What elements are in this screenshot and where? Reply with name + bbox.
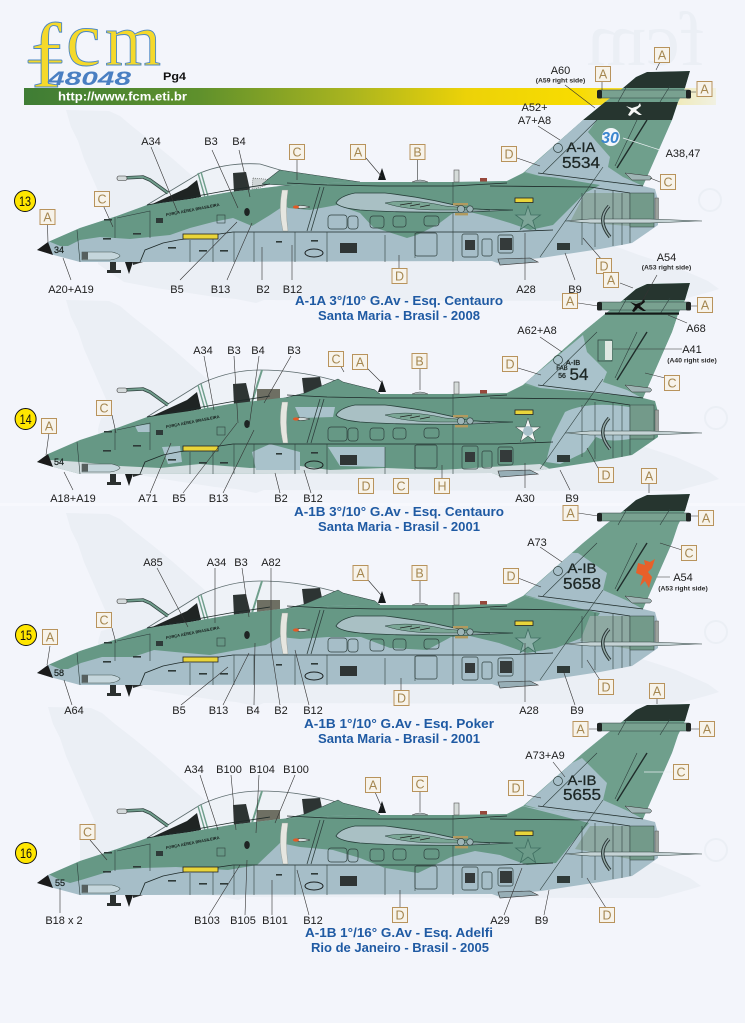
part codes 15: B9 <box>570 705 584 717</box>
nose number 14: 54 <box>54 457 64 467</box>
yellow marking 13 <box>515 198 533 202</box>
nose number 16: 55 <box>55 878 65 888</box>
caption 16: Rio de Janeiro - Brasil - 2005 <box>311 940 489 955</box>
part codes 14: A62+A8 <box>517 325 557 337</box>
part codes 14: A34 <box>193 345 213 357</box>
leaders 16 <box>60 698 700 915</box>
caption 16 <box>305 925 493 955</box>
badge 15: 15 <box>20 627 32 643</box>
callout boxes 16: D <box>511 782 521 796</box>
part codes 15: B13 <box>209 705 228 717</box>
callout boxes 15: B <box>415 566 424 580</box>
tail code 14: A-IB <box>566 358 580 367</box>
callout boxes 15: D <box>601 680 611 694</box>
callout boxes 13: D <box>395 270 404 284</box>
part codes 16: B103 <box>194 915 220 927</box>
tail code 16 <box>563 772 601 804</box>
aircraft 16 <box>37 704 702 907</box>
part codes 13: B13 <box>211 284 230 296</box>
part codes 13: A28 <box>516 284 536 296</box>
part codes 16: B100 <box>283 764 309 776</box>
part codes 14: B12 <box>303 493 323 505</box>
callout boxes 16: C <box>83 826 92 840</box>
part codes 13: B3 <box>204 136 218 148</box>
part codes 15: B3 <box>234 557 248 569</box>
part codes 14: A41 <box>682 344 702 356</box>
stag emblem 14 <box>630 299 646 312</box>
part codes 13: A7+A8 <box>518 115 551 127</box>
part codes 14: A54 <box>657 252 676 264</box>
callout boxes 15: C <box>684 546 694 560</box>
show-through ghosts from the reverse of the sheet: fcm <box>587 0 705 82</box>
tail code 13 <box>562 139 600 172</box>
callout boxes 16: C <box>415 778 425 792</box>
callout boxes 15 <box>42 468 714 706</box>
part codes 14: (A40 right side) <box>667 358 717 364</box>
national star 15 <box>516 629 540 652</box>
badge 14 <box>15 408 36 430</box>
part codes 14: B4 <box>251 345 265 357</box>
part codes 15: A54 <box>673 572 693 584</box>
part codes 13: A38,47 <box>666 148 700 160</box>
part codes 14: B2 <box>274 493 288 505</box>
fcm logo: f <box>31 5 62 107</box>
callout boxes 15: A <box>702 512 711 526</box>
callout boxes 14: A <box>356 356 365 370</box>
callout boxes 15: A <box>46 630 55 644</box>
callout boxes 13: A <box>354 146 363 160</box>
callout boxes 15: A <box>645 470 654 484</box>
callout boxes 15: A <box>566 506 575 520</box>
tail code 15: 5658 <box>563 576 601 593</box>
badge 13: 13 <box>19 193 31 209</box>
part codes 14: B5 <box>172 493 186 505</box>
callout boxes 14: B <box>415 354 424 368</box>
tail stag emblem 13 <box>626 103 642 116</box>
callout boxes 13: B <box>413 146 422 160</box>
part codes 14: B9 <box>565 493 579 505</box>
caption 14: Santa Maria - Brasil - 2001 <box>318 519 480 534</box>
part codes 13: B12 <box>283 284 302 296</box>
camouflage 13 <box>48 71 690 246</box>
camouflage 14 <box>40 283 690 482</box>
part codes 15: (A53 right side) <box>658 586 708 592</box>
callout boxes 13: A <box>700 82 709 96</box>
part codes 13: B4 <box>232 136 246 148</box>
part codes 14: B13 <box>209 493 228 505</box>
tail code 14: 56 <box>558 373 566 380</box>
badge 15 <box>16 624 36 646</box>
part codes 16: B105 <box>230 915 256 927</box>
camouflage 16 <box>48 704 690 883</box>
part codes 13: A34 <box>141 136 161 148</box>
callout boxes 16: A <box>653 684 662 698</box>
part codes 13: A52+ <box>522 102 548 114</box>
part codes 15: B12 <box>303 705 323 717</box>
lion emblem <box>636 559 655 588</box>
part codes 15 <box>64 537 708 717</box>
part codes 14: A30 <box>515 493 535 505</box>
part codes 16: B12 <box>303 915 323 927</box>
fin panel 14 <box>598 340 612 361</box>
callout boxes 13 <box>40 48 712 284</box>
part codes 13: B9 <box>568 284 582 296</box>
part codes 14 <box>50 252 717 505</box>
national roundel 14 <box>516 418 540 442</box>
part codes 14: A68 <box>686 323 706 335</box>
tail code 13: A-IA <box>566 139 596 155</box>
part codes 13: A60 <box>551 65 570 77</box>
callout boxes 13: C <box>97 192 107 206</box>
caption 13: Santa Maria - Brasil - 2008 <box>318 308 480 323</box>
callout boxes 13: C <box>663 176 673 190</box>
callout boxes 13: D <box>504 148 514 162</box>
caption 13: A-1A 3°/10° G.Av - Esq. Centauro <box>295 293 503 308</box>
part codes 15: A85 <box>143 557 163 569</box>
part codes 15: A34 <box>207 557 226 569</box>
callout boxes 14: A <box>701 298 710 312</box>
header band <box>24 88 716 105</box>
tail code 14 <box>556 358 588 384</box>
page number: Pg4 <box>163 71 187 83</box>
part codes 16: B9 <box>535 915 548 927</box>
callout boxes 13: A <box>43 210 52 224</box>
national star 16 <box>516 839 540 862</box>
callout boxes 16: C <box>676 766 686 780</box>
part codes 13: (A59 right side) <box>536 78 585 84</box>
part codes 16: A29 <box>490 915 510 927</box>
callout boxes 13: D <box>599 260 609 274</box>
part codes 16: B100 <box>216 764 242 776</box>
caption 15: A-1B 1°/10° G.Av - Esq. Poker <box>304 716 494 731</box>
part codes 13: B5 <box>170 284 184 296</box>
part codes 14: A71 <box>138 493 158 505</box>
caption 16: A-1B 1°/16° G.Av - Esq. Adelfi <box>305 925 493 940</box>
part codes 16 <box>45 750 565 927</box>
part codes 14: B3 <box>287 345 301 357</box>
aircraft 14 <box>37 283 702 486</box>
callout boxes 14: C <box>99 402 109 416</box>
leaders 15 <box>47 484 698 705</box>
nose number 13: 34 <box>54 245 64 255</box>
nose number 15: 58 <box>54 668 64 678</box>
callout boxes 14: A <box>607 274 616 288</box>
part codes 16: A73+A9 <box>525 750 565 762</box>
aircraft 13 <box>37 71 702 274</box>
aircraft 15 <box>37 494 702 697</box>
callout boxes 15: A <box>356 566 365 580</box>
part codes 13: A20+A19 <box>48 284 94 296</box>
website url: http://www.fcm.eti.br <box>58 90 187 104</box>
callout boxes 16 <box>80 684 714 922</box>
part codes 14: A18+A19 <box>50 493 96 505</box>
callout boxes 16: A <box>703 722 712 736</box>
badge 14: 14 <box>20 411 32 427</box>
caption 15 <box>304 716 494 746</box>
part codes 15: A28 <box>519 705 539 717</box>
tail code 14: FAB <box>556 366 568 372</box>
callout boxes 15: D <box>397 692 406 706</box>
caption 14 <box>294 504 504 534</box>
callout boxes 15: C <box>99 614 109 628</box>
callout boxes 14: D <box>601 468 611 482</box>
callout boxes 16: D <box>602 908 612 922</box>
product number: 48048 <box>46 69 132 90</box>
callout boxes 16: A <box>576 722 585 736</box>
callout boxes 14: C <box>396 480 406 494</box>
camouflage 15 <box>48 494 690 669</box>
callout boxes 14: C <box>331 352 341 366</box>
callout boxes 14: D <box>505 358 515 372</box>
badge 13 <box>14 190 36 212</box>
part codes 15: A64 <box>64 705 84 717</box>
caption 13 <box>295 293 503 323</box>
callout boxes 14: A <box>566 294 575 308</box>
tail code 14: 54 <box>570 365 588 384</box>
callout boxes 14 <box>42 272 712 494</box>
badge 16: 16 <box>20 845 32 861</box>
leaders 14 <box>46 275 700 493</box>
part codes 15: A82 <box>261 557 281 569</box>
part codes 15: A73 <box>527 537 547 549</box>
yellow marking 15 <box>515 621 533 626</box>
part codes 15: B2 <box>274 705 288 717</box>
yellow marking 14 <box>515 410 533 414</box>
caption 15: Santa Maria - Brasil - 2001 <box>318 731 480 746</box>
callout boxes 14: C <box>667 376 677 390</box>
callout boxes 16: D <box>395 908 405 922</box>
fold crease <box>0 503 745 506</box>
fcm logo <box>28 0 161 107</box>
badge 16 <box>16 842 36 864</box>
30 years badge: 30 <box>601 130 619 147</box>
tail code 15: A-IB <box>568 560 596 576</box>
national star 13 <box>516 206 540 230</box>
caption 14: A-1B 3°/10° G.Av - Esq. Centauro <box>294 504 504 519</box>
part codes 16: A34 <box>184 764 204 776</box>
callout boxes 14: A <box>45 420 54 434</box>
part codes 14: (A53 right side) <box>642 264 691 272</box>
leaders 13 <box>48 62 696 280</box>
fcm logo: m <box>105 0 161 82</box>
part codes 13: B2 <box>256 284 270 296</box>
tail code 15 <box>563 560 601 593</box>
callout boxes 14: D <box>361 480 371 494</box>
part codes 14: B3 <box>227 345 241 357</box>
callout boxes 13: A <box>658 48 667 62</box>
part codes 15: B4 <box>246 705 260 717</box>
yellow marking 16 <box>515 831 533 836</box>
part codes 13 <box>48 65 700 296</box>
tail code 13: 5534 <box>562 155 600 172</box>
part codes 16: B101 <box>262 915 288 927</box>
tail code 16: A-IB <box>568 772 596 788</box>
part codes 16: B18 x 2 <box>45 915 83 927</box>
tail code 16: 5655 <box>563 787 601 804</box>
part codes 15: B5 <box>172 705 186 717</box>
callout boxes 16: A <box>369 778 378 792</box>
part codes 16: B104 <box>249 764 275 776</box>
callout boxes 13: C <box>292 146 302 160</box>
callout boxes 13: A <box>599 68 608 82</box>
callout boxes 14: H <box>437 480 447 494</box>
callout boxes 15: D <box>506 570 516 584</box>
